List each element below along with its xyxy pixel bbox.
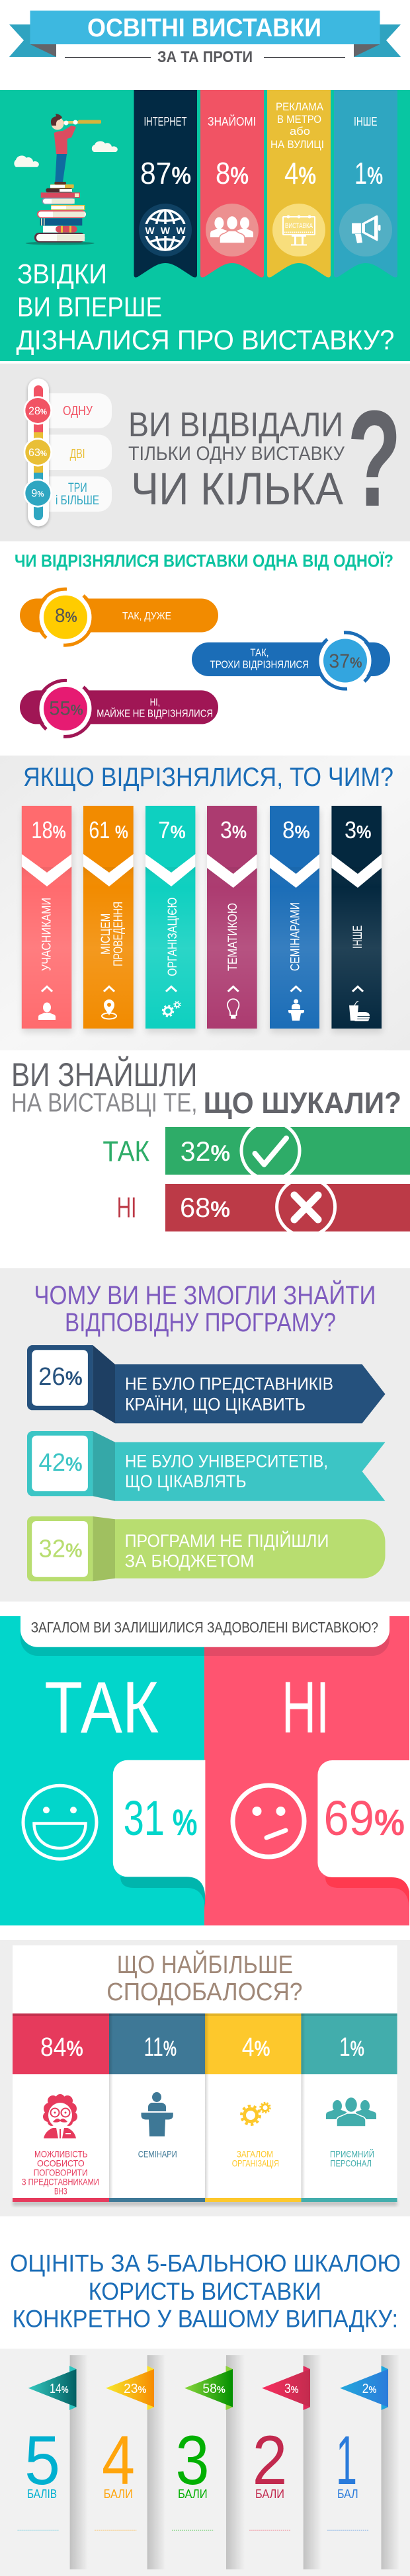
panel: scores	[0, 2349, 410, 2576]
score 3	[172, 2366, 233, 2530]
score 3: БАЛИ	[178, 2487, 208, 2501]
score 3: 3	[176, 2422, 209, 2499]
arrow: no country representatives: 26%	[38, 1363, 83, 1391]
banner: internet: 87%	[140, 156, 191, 190]
heading: did you find what you sought: ЩО ШУКАЛИ?	[204, 1086, 401, 1120]
icon: globe www: WWW	[145, 225, 186, 237]
illustration: man with telescope on books	[14, 114, 118, 245]
score 2: БАЛИ	[255, 2487, 284, 2501]
heading	[34, 1280, 376, 1337]
icon: people	[210, 215, 253, 243]
tab: two	[46, 435, 112, 470]
pill: no almost no difference: НІ,	[150, 697, 160, 708]
arrow: no country representatives: НЕ БУЛО ПРЕДСТАВНИКІВ	[125, 1374, 333, 1393]
pill: yes a little: ТАК,	[250, 648, 268, 659]
column: pleasant staff: ПЕРСОНАЛ	[330, 2158, 372, 2168]
bar: yes	[103, 1127, 410, 1175]
arrow: budget: 32%	[38, 1536, 82, 1563]
score 4	[95, 2366, 154, 2530]
arrow: no universities: 42%	[38, 1449, 82, 1477]
pill: yes very	[20, 589, 218, 645]
column: organisation: ОРГАНІЗАЦІЄЮ	[166, 898, 180, 976]
no side	[233, 1667, 410, 1910]
panel: where first learned	[0, 90, 410, 361]
percent card: 31 %	[124, 1791, 197, 1846]
score 2: 3%	[284, 2382, 299, 2396]
arrow: budget	[27, 1516, 385, 1581]
pill: yes very: 8%	[55, 605, 77, 627]
percent card	[317, 1760, 410, 1910]
thermometer gauge: 63%	[28, 446, 47, 459]
heading: did you visit one or several: ВИ ВІДВІДАЛИ	[128, 406, 343, 444]
column: overall organisation: ОРГАНІЗАЦІЯ	[232, 2158, 279, 2168]
score 4: БАЛИ	[104, 2487, 133, 2501]
score 5: БАЛІВ	[27, 2487, 57, 2501]
arrow: no country representatives	[27, 1345, 385, 1423]
arrow: no universities	[27, 1431, 385, 1501]
subtitle: ЗА ТА ПРОТИ	[157, 48, 253, 66]
icon: globe www	[143, 210, 188, 250]
heading: did you find what you sought: НА ВИСТАВЦІ ТЕ,	[11, 1089, 197, 1118]
column: personal talks: 84%	[40, 2033, 83, 2062]
icon: check in circle	[239, 1127, 302, 1175]
tab: three or more: ТРИ	[68, 481, 87, 495]
banner: advertising: В МЕТРО	[277, 113, 321, 126]
heading: rate on a five-point scale	[10, 2250, 401, 2333]
column: venue: ПРОВЕДЕННЯ	[112, 902, 126, 966]
pill: yes a little: 37%	[329, 650, 362, 672]
arrow: no country representatives: КРАЇНИ, ЩО ЦІКАВИТЬ	[125, 1394, 306, 1414]
title: ОСВІТНІ ВИСТАВКИ	[87, 14, 321, 42]
icon: doubtful face	[233, 1785, 304, 1857]
column: overall organisation: 4%	[242, 2033, 270, 2062]
column: topic: ТЕМАТИКОЮ	[226, 903, 240, 971]
column: personal talks	[13, 2013, 109, 2202]
icon: megaphone	[352, 215, 381, 243]
icon: speaker at lectern	[142, 2092, 173, 2136]
tab: three or more	[46, 477, 112, 512]
score 1: 2%	[362, 2382, 376, 2396]
bar: no: НІ	[117, 1192, 136, 1224]
pill: yes a little: ТРОХИ ВІДРІЗНЯЛИСЯ	[210, 660, 309, 671]
score 2	[249, 2366, 310, 2530]
arrow: no universities: ЩО ЦІКАВЛЯТЬ	[125, 1471, 246, 1491]
heading: where did you first learn	[16, 258, 394, 356]
heading: did you find what you sought: ВИ ЗНАЙШЛИ	[11, 1056, 197, 1093]
heading: did you find what you sought	[11, 1056, 401, 1120]
percent card	[113, 1760, 205, 1910]
no side: НІ	[282, 1667, 329, 1748]
score 1: 1	[336, 2422, 357, 2499]
banner: friends	[200, 90, 264, 278]
heading: СПОДОБАЛОСЯ?	[106, 1978, 303, 2006]
column: overall organisation	[205, 2013, 301, 2202]
bar: no	[118, 1184, 410, 1231]
score 1: БАЛ	[337, 2487, 358, 2501]
column: pleasant staff: ПРИЄМНИЙ	[330, 2148, 374, 2159]
score 4: 4	[102, 2422, 135, 2499]
icon: people	[326, 2097, 376, 2127]
column: participants	[22, 806, 73, 1033]
tab: one	[46, 393, 112, 428]
yes side	[23, 1667, 205, 1910]
pill: yes very: ТАК, ДУЖЕ	[122, 611, 171, 622]
column: organisation: 7%	[158, 816, 186, 843]
pill: no almost no difference: 55%	[49, 698, 83, 719]
header ribbon	[9, 11, 401, 57]
column: seminars: 8%	[282, 816, 310, 843]
heading: ЩО НАЙБІЛЬШЕ	[117, 1949, 293, 1979]
icon: professor	[43, 2094, 77, 2138]
score 5: 5	[24, 2422, 60, 2499]
score 1	[327, 2366, 388, 2530]
score 5	[17, 2366, 77, 2530]
column: pleasant staff: 1%	[339, 2033, 364, 2062]
heading: ВІДПОВІДНУ ПРОГРАМУ?	[65, 1308, 336, 1337]
banner: advertising	[267, 90, 331, 278]
banner: advertising: або	[290, 125, 310, 137]
banner: other: 1%	[354, 156, 383, 190]
icon: gears	[241, 2103, 270, 2125]
banner: internet: ІНТЕРНЕТ	[144, 115, 186, 128]
column: topic	[207, 806, 258, 1033]
column: seminars: 11%	[144, 2033, 177, 2062]
arrow: budget: ЗА БЮДЖЕТОМ	[125, 1551, 255, 1571]
score 5: 14%	[50, 2382, 69, 2396]
column: other: ІНШЕ	[351, 925, 365, 949]
percent card: 69%	[324, 1791, 405, 1846]
icon: billboard	[283, 215, 315, 246]
column: personal talks: МОЖЛИВІСТЬ	[34, 2148, 87, 2159]
column: personal talks: ОСОБИСТО	[37, 2158, 85, 2168]
icon: cross in circle	[275, 1184, 337, 1231]
thermometer gauge	[24, 378, 52, 527]
column: personal talks: ВНЗ	[54, 2185, 67, 2196]
bar: no: 68%	[180, 1192, 230, 1223]
bar: yes: 32%	[181, 1136, 230, 1167]
thermometer gauge: 28%	[28, 405, 47, 417]
column: seminars	[109, 2013, 205, 2202]
tab: one: ОДНУ	[63, 404, 93, 418]
column: venue: МІСЦЕМ	[99, 914, 113, 955]
question pill	[20, 1616, 390, 1656]
heading: where did you first learn: ЗВІДКИ	[17, 258, 107, 290]
panel: why could not find a programme	[0, 1268, 410, 1602]
column: other: 3%	[345, 816, 372, 843]
score 3: 58%	[202, 2382, 226, 2396]
pill: no almost no difference	[20, 680, 218, 736]
banner: other: ІНШЕ	[354, 115, 378, 128]
pill: yes a little	[192, 633, 390, 689]
banner: advertising: РЕКЛАМА	[276, 100, 324, 113]
banner: advertising: 4%	[284, 156, 316, 190]
banner: advertising: НА ВУЛИЦІ	[270, 138, 324, 151]
column: personal talks: ПОГОВОРИТИ	[34, 2167, 87, 2177]
panel: what liked most	[0, 1940, 410, 2216]
banner: friends: 8%	[216, 156, 249, 190]
heading: where did you first learn: ДІЗНАЛИСЯ ПРО ВИСТАВКУ?	[16, 325, 394, 356]
banner: other	[334, 90, 397, 278]
arrow: budget: ПРОГРАМИ НЕ ПІДІЙШЛИ	[125, 1530, 329, 1551]
heading: where did you first learn: ВИ ВПЕРШЕ	[17, 292, 162, 323]
heading: did you visit one or several: ЧИ КІЛЬКА	[131, 463, 343, 514]
tab: two: ДВІ	[70, 447, 85, 461]
icon: billboard: ВИСТАВКА	[285, 222, 313, 230]
column: seminars: СЕМІНАРАМИ	[289, 902, 303, 971]
heading: did you visit one or several: ТІЛЬКИ ОДНУ ВИСТАВКУ	[128, 443, 345, 465]
thermometer gauge: 9%	[31, 487, 44, 500]
yes side: ТАК	[44, 1667, 159, 1748]
column: seminars	[270, 806, 321, 1033]
heading	[106, 1949, 303, 2006]
tab: three or more: і БІЛЬШЕ	[56, 494, 99, 508]
column: overall organisation: ЗАГАЛОМ	[237, 2148, 273, 2159]
pill: no almost no difference: МАЙЖЕ НЕ ВІДРІЗНЯЛИСЯ	[97, 707, 213, 720]
arrow: no universities: НЕ БУЛО УНІВЕРСИТЕТІВ,	[125, 1451, 328, 1471]
score 2: 2	[253, 2422, 287, 2499]
column: participants: 18%	[31, 816, 66, 843]
panel: overall satisfied	[0, 1616, 410, 1926]
heading: did you visit one or several	[128, 406, 345, 514]
column: topic: 3%	[220, 816, 247, 843]
column: seminars: СЕМІНАРИ	[138, 2148, 177, 2159]
banner: internet	[134, 90, 197, 278]
banner: friends: ЗНАЙОМІ	[208, 114, 256, 128]
column: pleasant staff	[301, 2013, 397, 2202]
column: venue: 61 %	[89, 816, 128, 843]
bar: yes: ТАК	[102, 1136, 149, 1168]
heading: rate on a five-point scale: КОРИСТЬ ВИСТАВКИ	[89, 2278, 321, 2305]
column: venue	[83, 806, 134, 1033]
panel: how many exhibitions	[0, 364, 410, 541]
column: organisation	[145, 806, 196, 1033]
icon: smiling face	[23, 1785, 97, 1859]
column: personal talks: З ПРЕДСТАВНИКАМИ	[22, 2176, 99, 2187]
heading: rate on a five-point scale: ОЦІНІТЬ ЗА 5-БАЛЬНОЮ ШКАЛОЮ	[10, 2250, 401, 2277]
column: participants: УЧАСНИКАМИ	[40, 898, 54, 971]
panel: how they differed	[0, 756, 410, 1050]
score 4: 23%	[124, 2382, 146, 2396]
column: other	[331, 806, 382, 1033]
